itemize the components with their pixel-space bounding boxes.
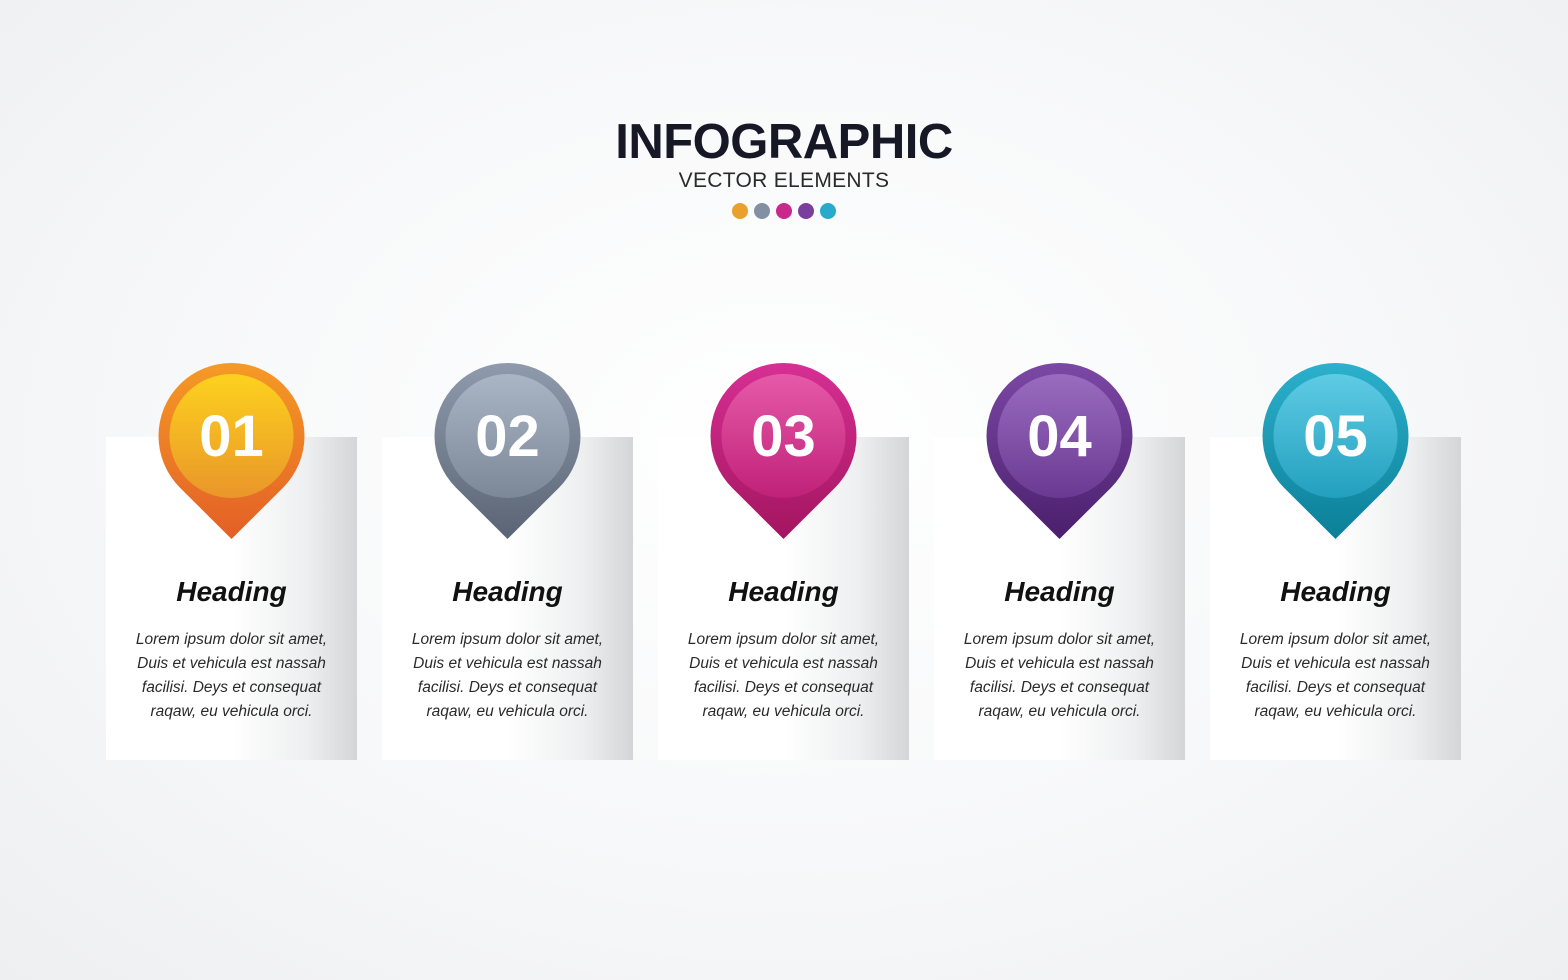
text 4: facilisi. Deys et consequat <box>970 679 1149 696</box>
icon: pin 04: 04 <box>1027 404 1092 469</box>
icon: pin 02: 02 <box>475 404 540 469</box>
text 3: Lorem ipsum dolor sit amet, <box>688 631 879 648</box>
text 4 <box>964 631 1155 720</box>
color dots <box>732 203 836 219</box>
icon: pin 01 <box>158 363 304 539</box>
text 3 <box>688 631 879 720</box>
icon: pin 05: 05 <box>1303 404 1368 469</box>
card 2 <box>385 363 633 760</box>
text 1: facilisi. Deys et consequat <box>142 679 321 696</box>
icon: pin 01: 01 <box>199 404 264 469</box>
text 2 <box>412 631 603 720</box>
text 3: raqaw, eu vehicula orci. <box>702 703 864 720</box>
heading 1: Heading <box>176 576 287 607</box>
icon: pin 03 <box>710 363 856 539</box>
text 5: Lorem ipsum dolor sit amet, <box>1240 631 1431 648</box>
text 3: facilisi. Deys et consequat <box>694 679 873 696</box>
text 1: Lorem ipsum dolor sit amet, <box>136 631 327 648</box>
card 3 <box>688 363 909 760</box>
heading 4: Heading <box>1004 576 1115 607</box>
text 5 <box>1240 631 1431 720</box>
text 5: facilisi. Deys et consequat <box>1246 679 1425 696</box>
text 4: Duis et vehicula est nassah <box>965 655 1154 672</box>
icon: pin 03: 03 <box>751 404 816 469</box>
icon: pin 05 <box>1262 363 1408 539</box>
heading 3: Heading <box>728 576 839 607</box>
text 5: raqaw, eu vehicula orci. <box>1254 703 1416 720</box>
text 3: Duis et vehicula est nassah <box>689 655 878 672</box>
text 2: raqaw, eu vehicula orci. <box>426 703 588 720</box>
text 2: Lorem ipsum dolor sit amet, <box>412 631 603 648</box>
text 1: raqaw, eu vehicula orci. <box>150 703 312 720</box>
icon: pin 04 <box>986 363 1132 539</box>
text 4: raqaw, eu vehicula orci. <box>978 703 1140 720</box>
text 2: facilisi. Deys et consequat <box>418 679 597 696</box>
card 1 <box>106 363 357 760</box>
text 2: Duis et vehicula est nassah <box>413 655 602 672</box>
text 4: Lorem ipsum dolor sit amet, <box>964 631 1155 648</box>
text 1 <box>136 631 327 720</box>
subtitle: VECTOR ELEMENTS <box>679 169 889 192</box>
card 4 <box>964 363 1185 760</box>
heading 2: Heading <box>452 576 563 607</box>
heading 5: Heading <box>1280 576 1391 607</box>
icon: pin 02 <box>434 363 580 539</box>
card 5 <box>1210 363 1461 760</box>
text 1: Duis et vehicula est nassah <box>137 655 326 672</box>
title: INFOGRAPHIC <box>615 115 953 169</box>
text 5: Duis et vehicula est nassah <box>1241 655 1430 672</box>
